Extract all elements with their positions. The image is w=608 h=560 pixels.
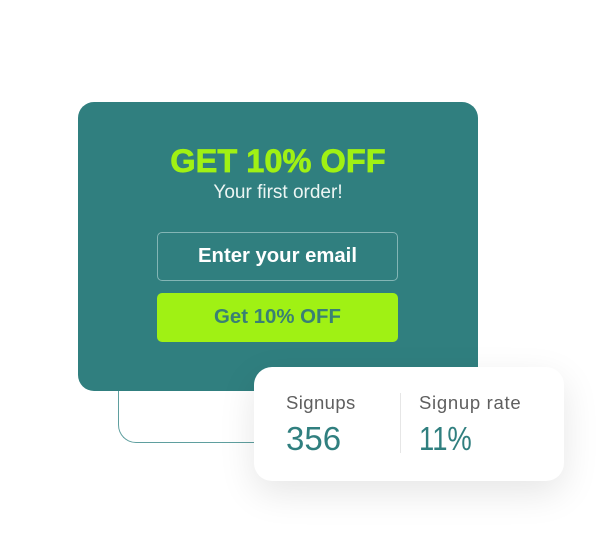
stat: signups value: 356 (286, 420, 341, 457)
submit button: Get 10% OFF (214, 306, 341, 328)
panel: stats card (254, 367, 564, 481)
panel: signup popup (78, 102, 478, 391)
stat: signup rate value: 11% (419, 420, 472, 457)
stat: signups label: Signups (286, 392, 356, 413)
divider (400, 393, 401, 453)
email input: Enter your email (198, 245, 357, 267)
subheading: Your first order! (213, 182, 343, 203)
connector line (118, 380, 268, 443)
heading: GET 10% OFF (170, 142, 386, 179)
submit button (157, 293, 398, 342)
email input (157, 232, 398, 281)
stat: signup rate label: Signup rate (419, 392, 521, 413)
